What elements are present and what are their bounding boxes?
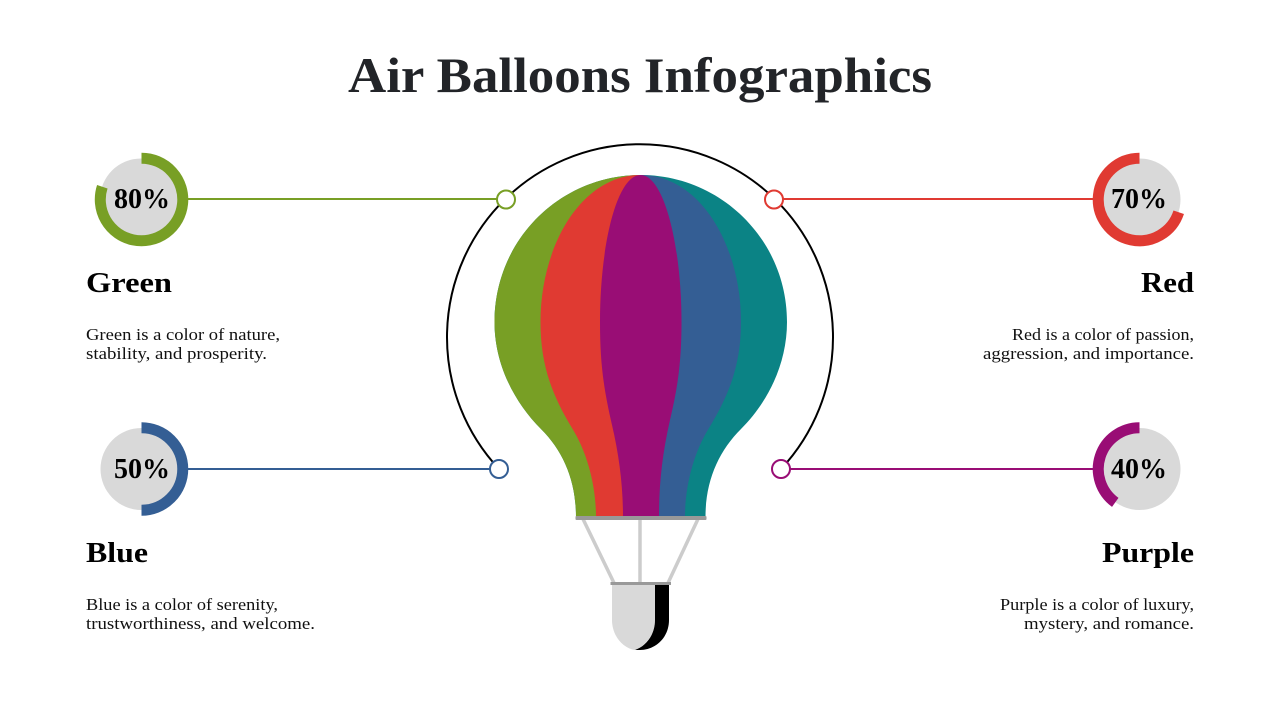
text: blue description	[86, 595, 315, 633]
heading: purple: Purple	[1102, 537, 1194, 569]
balloon stripe: red	[540, 175, 640, 517]
connector line: purple	[789, 468, 1096, 470]
heading: red: Red	[1141, 267, 1194, 299]
arc around balloon	[447, 144, 833, 469]
text: purple description: Purple is a color of luxury,	[1000, 595, 1194, 614]
connector line: red	[782, 198, 1096, 200]
donut: red 70%: 70%	[1111, 184, 1167, 215]
text: green description	[86, 325, 280, 363]
panel: purple	[772, 428, 1194, 633]
text: green description: Green is a color of nature,	[86, 325, 280, 344]
donut: purple 40%	[1098, 428, 1180, 510]
donut: green 80%	[100, 158, 183, 241]
balloon ropes	[583, 519, 698, 583]
text: purple description: mystery, and romance.	[1024, 614, 1194, 633]
marker: blue	[490, 460, 508, 478]
panel: red	[765, 158, 1194, 363]
balloon envelope: teal base	[494, 175, 787, 517]
balloon stripe: purple	[600, 175, 682, 517]
text: red description	[983, 325, 1194, 363]
title: Air Balloons Infographics	[348, 47, 932, 103]
marker: purple	[772, 460, 790, 478]
text: purple description	[1000, 595, 1194, 633]
connector line: blue	[186, 468, 491, 470]
balloon stripe: green	[494, 175, 640, 517]
marker: red	[765, 190, 783, 208]
connector line: green	[186, 198, 498, 200]
heading: blue: Blue	[86, 537, 148, 569]
marker: green	[497, 190, 515, 208]
panel: blue	[86, 428, 508, 633]
balloon stripe: blue	[640, 175, 741, 517]
text: red description: aggression, and importance.	[983, 344, 1194, 363]
text: blue description: trustworthiness, and welcome.	[86, 614, 315, 633]
text: green description: stability, and prosperity.	[86, 344, 267, 363]
donut: green 80%: 80%	[114, 184, 170, 215]
donut: blue 50%: 50%	[114, 454, 170, 485]
basket	[610, 582, 671, 650]
donut: red 70%	[1098, 158, 1180, 241]
balloon hoop	[576, 516, 706, 520]
text: red description: Red is a color of passion,	[1012, 325, 1194, 344]
hot air balloon	[494, 175, 787, 650]
text: blue description: Blue is a color of serenity,	[86, 595, 278, 614]
donut: purple 40%: 40%	[1111, 454, 1167, 485]
donut: blue 50%	[100, 428, 183, 510]
panel: green	[86, 158, 515, 363]
heading: green: Green	[86, 267, 172, 299]
